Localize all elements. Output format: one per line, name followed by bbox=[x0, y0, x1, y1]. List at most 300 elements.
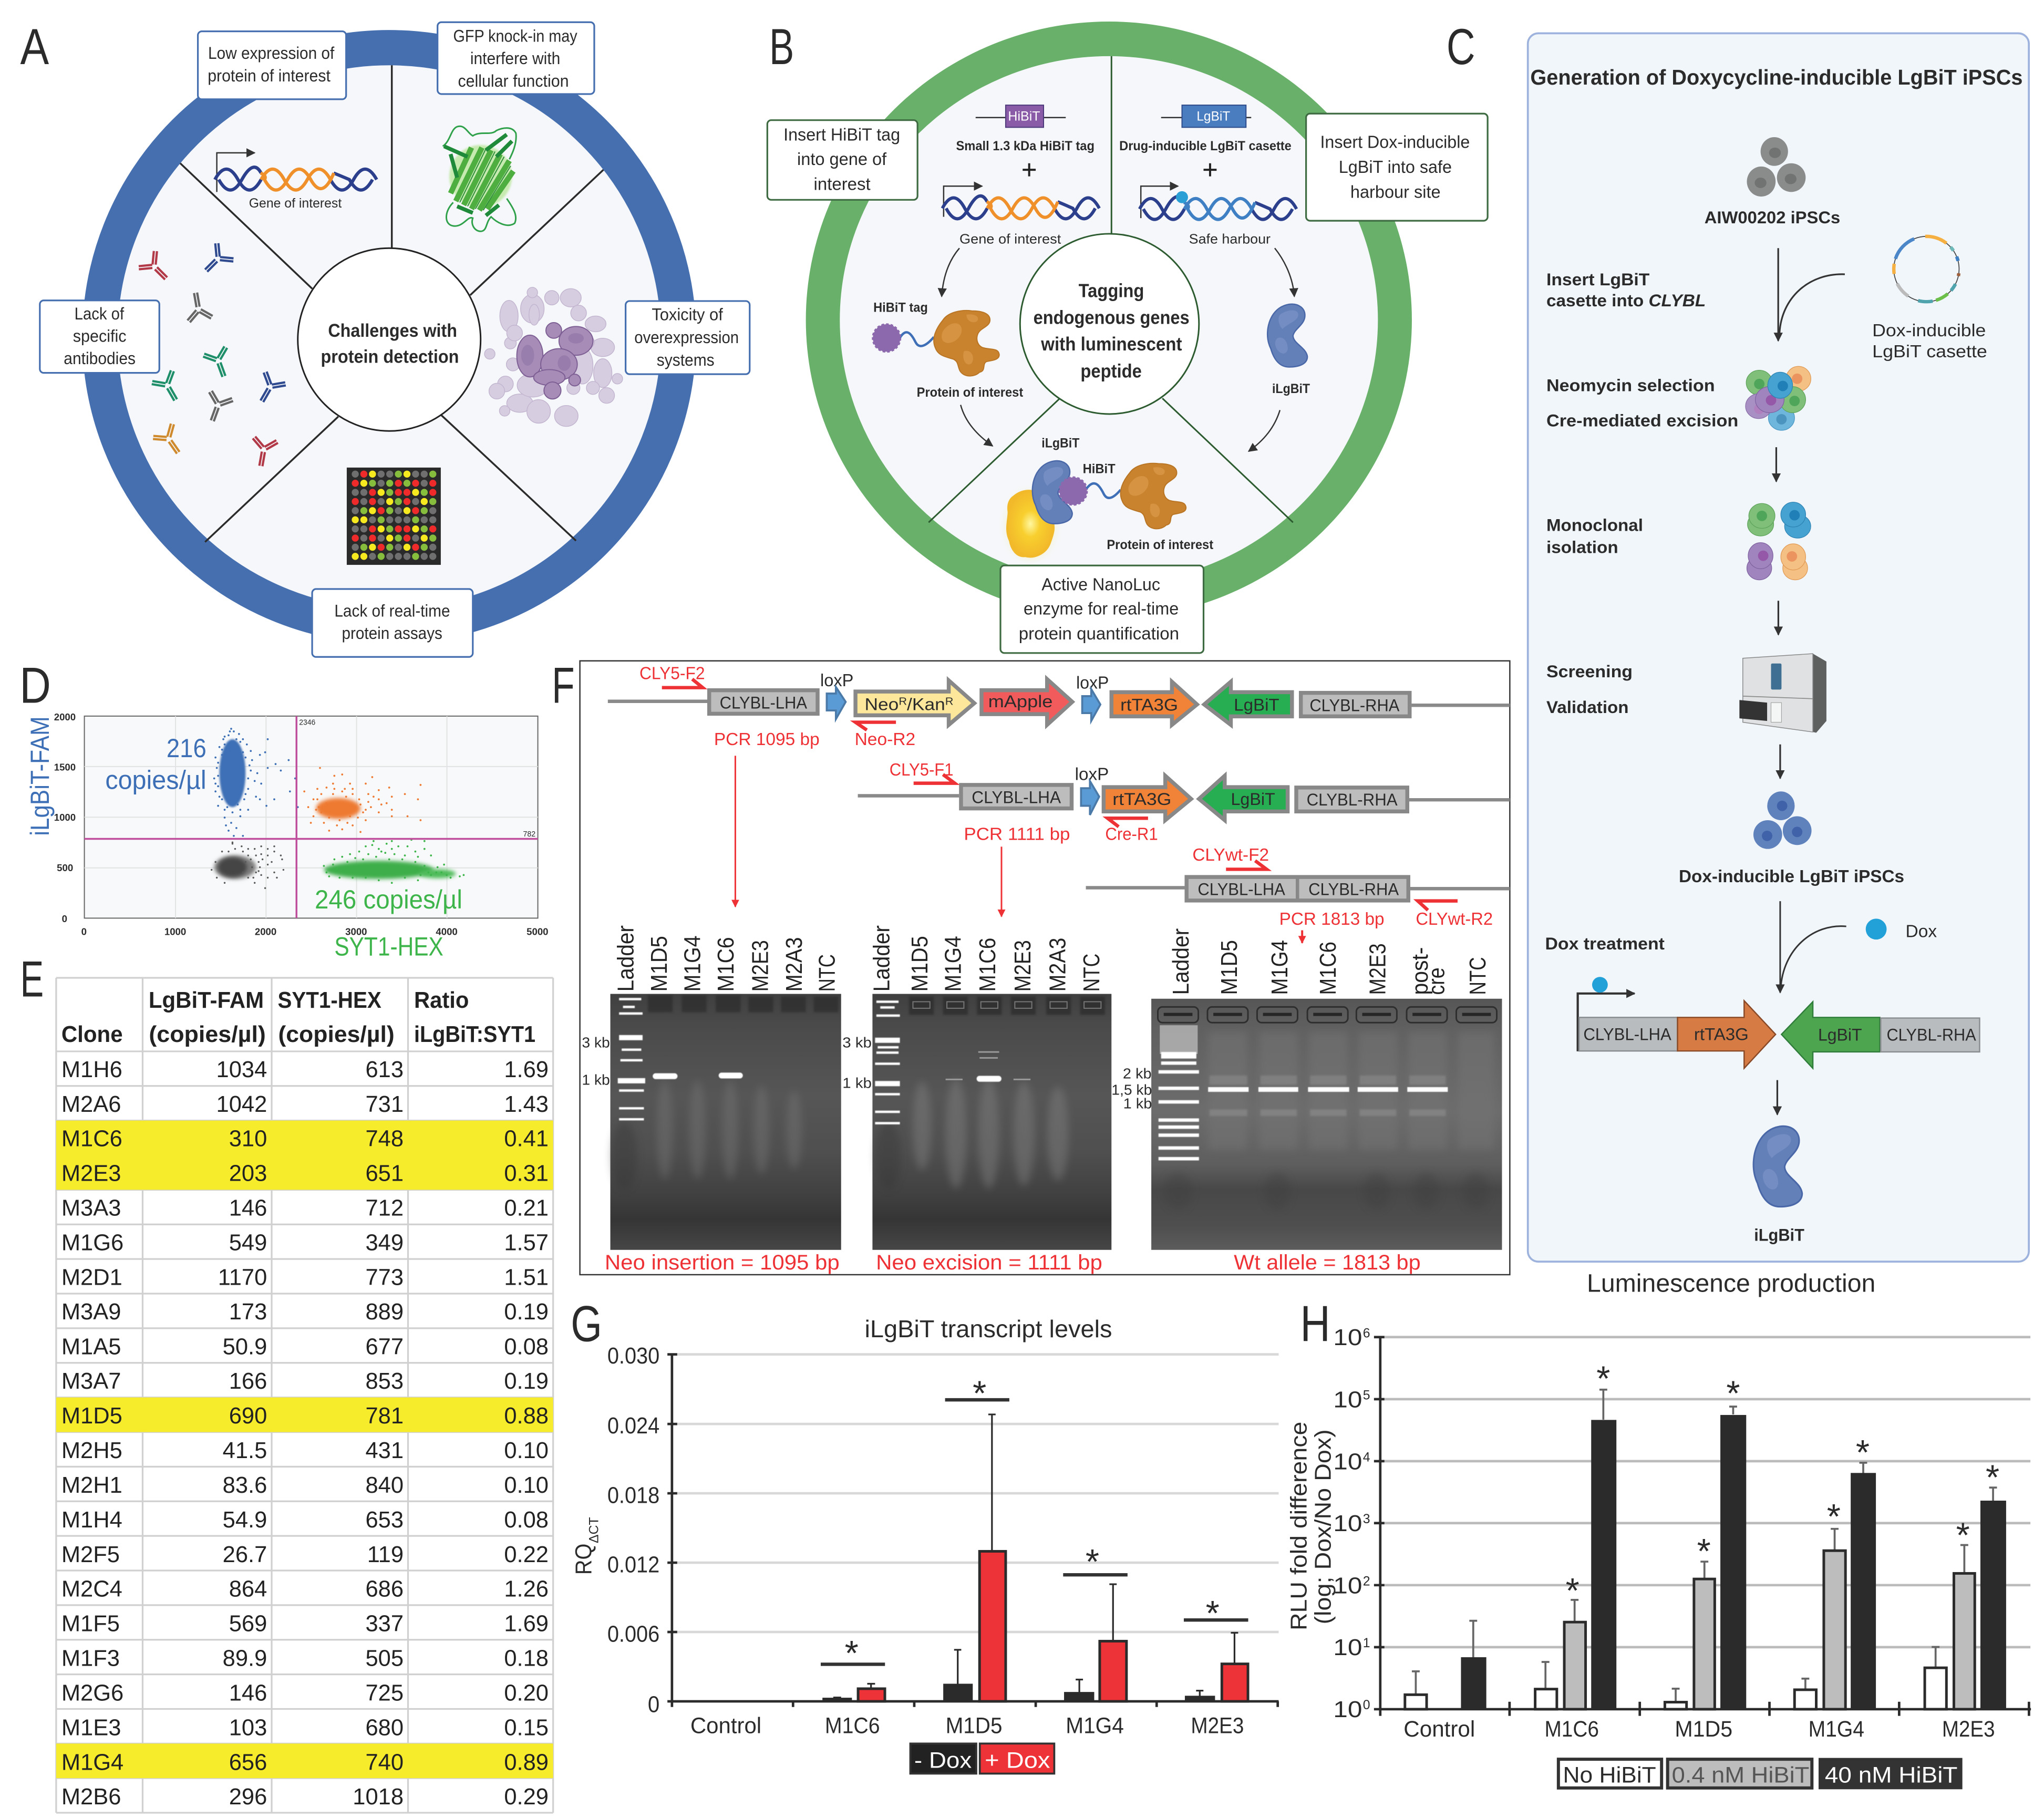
table header: Ratio bbox=[414, 988, 469, 1013]
significance asterisks: * bbox=[1086, 1542, 1099, 1582]
legend: plus Dox bbox=[980, 1743, 1054, 1773]
table rows: M2D1 bbox=[61, 1265, 122, 1290]
workflow title: Generation of Doxycycline-inducible LgBiT iPSCs bbox=[1530, 65, 2022, 89]
y tick labels: 1000 bbox=[54, 812, 76, 823]
gel 2 size markers bbox=[842, 1034, 872, 1091]
axes bbox=[667, 1355, 1278, 1707]
table header: SYT1-HEX bbox=[277, 988, 381, 1013]
table rows: 0.10 bbox=[504, 1438, 549, 1463]
construct 3 primers: CLYwt-R2 bbox=[1416, 910, 1493, 929]
gel captions bbox=[605, 1251, 1421, 1274]
table rows: 740 bbox=[365, 1750, 404, 1775]
significance asterisks: * bbox=[845, 1634, 859, 1673]
y tick labels: 2 bbox=[1363, 1575, 1370, 1589]
table rows: 725 bbox=[365, 1681, 404, 1706]
arrow: to iLgBiT bbox=[1777, 1080, 1778, 1114]
construct diagram: LgBiT bbox=[1818, 1026, 1862, 1045]
icon: Dox-inducible cells bbox=[1679, 791, 1904, 886]
construct 3 primers: PCR 1813 bp bbox=[1279, 910, 1385, 929]
panel letter B: B bbox=[769, 18, 794, 75]
y tick labels: 0 bbox=[648, 1692, 659, 1718]
copies label blue: 216 bbox=[167, 734, 207, 763]
category labels: M1D5 bbox=[946, 1713, 1002, 1738]
panel letter F: F bbox=[552, 656, 575, 714]
x tick labels: 3000 bbox=[345, 926, 367, 937]
category labels bbox=[690, 1713, 1244, 1738]
construct 1: R bbox=[899, 696, 907, 707]
panel letter G: G bbox=[571, 1295, 602, 1352]
AIW cells: AIW00202 iPSCs bbox=[1705, 208, 1840, 227]
gel 2 lane labels: M1D5 bbox=[907, 936, 933, 991]
threshold values: 2346 bbox=[299, 719, 315, 727]
table rows: 1018 bbox=[353, 1784, 404, 1810]
table rows: M1H4 bbox=[61, 1507, 122, 1533]
construct 1: rtTA3G bbox=[1120, 696, 1178, 715]
table rows: 686 bbox=[365, 1577, 404, 1602]
table header: LgBiT-FAM bbox=[149, 988, 264, 1013]
Dox molecule legend: Dox bbox=[1906, 922, 1937, 942]
table rows: M1A5 bbox=[61, 1334, 121, 1359]
panel letter D: D bbox=[19, 656, 51, 714]
callout: active NanoLuc bbox=[1000, 565, 1204, 653]
x tick labels: 0 bbox=[81, 926, 87, 937]
callout: toxicity: overexpression bbox=[634, 328, 739, 347]
construct diagram: CLYBL-LHA bbox=[1583, 1025, 1671, 1044]
step text: insert bbox=[1546, 270, 1706, 310]
gel 1 image bbox=[611, 994, 841, 1250]
table rows: 0.21 bbox=[504, 1196, 549, 1221]
centre circle: Challenges with bbox=[328, 321, 457, 341]
gel 2 size markers: 1 kb bbox=[842, 1075, 872, 1091]
y axis label: (log; Dox/No Dox) bbox=[1311, 1429, 1336, 1624]
wheel ring bbox=[806, 22, 1412, 618]
table rows: 146 bbox=[229, 1681, 267, 1706]
centre circle: Tagging bbox=[1079, 280, 1144, 302]
icon: plasmid: Dox-inducible bbox=[1872, 321, 1986, 340]
table rows: M1C6 bbox=[61, 1127, 122, 1152]
y tick labels: 1 bbox=[1363, 1636, 1370, 1650]
x tick labels: 1000 bbox=[164, 926, 186, 937]
gel 3 lane labels: Ladder bbox=[1169, 928, 1194, 995]
table rows: M2H1 bbox=[61, 1473, 122, 1498]
gel 3 lane labels bbox=[1169, 928, 1491, 995]
callout: antibodies: specific bbox=[73, 326, 127, 345]
table rows: M2F5 bbox=[61, 1542, 120, 1567]
gel 1 lane labels: M2A3 bbox=[782, 937, 807, 991]
centre circle bbox=[1020, 234, 1199, 414]
table rows: M1G4 bbox=[61, 1750, 123, 1775]
step text: insert: Insert LgBiT bbox=[1546, 270, 1650, 289]
construct diagram bbox=[1578, 977, 1979, 1068]
bars: no HiBiT bbox=[1405, 1668, 1946, 1709]
spokes bbox=[180, 65, 603, 542]
legend: 40 nM HiBiT: 40 nM HiBiT bbox=[1825, 1762, 1957, 1787]
icon: gene of interest DNA bbox=[215, 153, 377, 211]
table rows: 0.19 bbox=[504, 1299, 549, 1325]
callout: insert Dox-inducible bbox=[1306, 113, 1488, 221]
step text: Dox treatment: Dox treatment bbox=[1545, 934, 1665, 953]
table rows: M3A7 bbox=[61, 1369, 121, 1394]
x axis label: SYT1-HEX bbox=[334, 932, 443, 961]
table rows: 0.18 bbox=[504, 1646, 549, 1671]
gel 3 image bbox=[1151, 999, 1502, 1250]
legend: plus Dox: + Dox bbox=[985, 1748, 1050, 1773]
legend: 40 nM HiBiT bbox=[1819, 1758, 1963, 1789]
arrow: gene to tag bbox=[942, 248, 959, 296]
centre circle: peptide bbox=[1080, 360, 1142, 381]
gel captions: Neo insertion = 1095 bp bbox=[605, 1251, 840, 1274]
callout: low expression: Low expression of bbox=[208, 44, 335, 63]
step text: selection: Neomycin selection bbox=[1546, 376, 1715, 395]
gel captions: Neo excision = 1111 bp bbox=[876, 1251, 1102, 1274]
table rows: 748 bbox=[365, 1127, 404, 1152]
gel 2 lane labels: M2A3 bbox=[1045, 938, 1070, 991]
table rows: 1170 bbox=[218, 1265, 267, 1290]
centre circle: endogenous genes bbox=[1034, 306, 1190, 328]
y axis label bbox=[571, 1517, 601, 1575]
arrow: to Dox-inducible cells bbox=[1780, 745, 1781, 778]
gel 1 lane labels: M2E3 bbox=[748, 940, 773, 991]
legend: 0.4 nM HiBiT: 0.4 nM HiBiT bbox=[1672, 1762, 1809, 1787]
orange droplets bbox=[304, 768, 420, 832]
gel 1 lane labels: M1G4 bbox=[680, 935, 705, 991]
table rows: 0.19 bbox=[504, 1369, 549, 1394]
icon: GFP protein barrel bbox=[443, 126, 516, 231]
y tick labels: 10 bbox=[1333, 1449, 1362, 1474]
bars: 0.4 nM HiBiT bbox=[1564, 1551, 1975, 1709]
table rows: 656 bbox=[229, 1750, 267, 1775]
x tick labels: 5000 bbox=[527, 926, 549, 937]
y tick labels bbox=[54, 711, 76, 924]
active NanoLuc complex illustration: iLgBiT bbox=[1041, 436, 1079, 450]
gel 2 lane labels bbox=[870, 925, 1104, 991]
callout: real-time assays: protein assays bbox=[342, 624, 442, 643]
wheel interior bbox=[840, 56, 1378, 584]
legend: no HiBiT: No HiBiT bbox=[1563, 1762, 1656, 1787]
table header: (copies/µl) bbox=[149, 1022, 266, 1047]
panel G: transcript bar chart bbox=[571, 1315, 1278, 1773]
gel 3 lane labels: NTC bbox=[1465, 957, 1491, 995]
LgBiT construct bbox=[1119, 105, 1292, 153]
table header bbox=[61, 988, 535, 1047]
table rows: 712 bbox=[365, 1196, 404, 1221]
y tick labels: 0 bbox=[62, 913, 67, 924]
iLgBiT illustration: iLgBiT bbox=[1272, 382, 1310, 396]
construct 1: R bbox=[945, 696, 954, 707]
table rows: 1.43 bbox=[504, 1092, 549, 1117]
construct 3 bbox=[1086, 876, 1510, 901]
callout: GFP knock-in bbox=[438, 22, 594, 94]
panel letter H: H bbox=[1300, 1295, 1330, 1352]
gel 1 lane labels: M1C6 bbox=[714, 937, 739, 991]
table rows: 653 bbox=[365, 1507, 404, 1533]
table rows: 0.22 bbox=[504, 1542, 549, 1567]
gel 3 size markers: 1 kb bbox=[1123, 1095, 1152, 1111]
y axis label: RQ bbox=[571, 1544, 596, 1575]
copies label blue bbox=[105, 734, 207, 794]
significance asterisks: * bbox=[1726, 1374, 1740, 1413]
workflow background bbox=[1528, 33, 2029, 1262]
table rows: 173 bbox=[229, 1299, 267, 1325]
y axis label: ΔCT bbox=[587, 1517, 601, 1543]
panel A: challenges wheel bbox=[40, 22, 750, 657]
table rows: 349 bbox=[365, 1230, 404, 1255]
callout: antibodies: Lack of bbox=[75, 304, 125, 323]
centre circle bbox=[298, 248, 481, 431]
callout: real-time assays bbox=[312, 589, 473, 657]
table rows: 1.26 bbox=[504, 1577, 549, 1602]
construct 3: CLYBL-LHA bbox=[1198, 880, 1285, 898]
panel letter C: C bbox=[1447, 18, 1475, 75]
gel 3 lane labels: M1C6 bbox=[1316, 942, 1341, 995]
table rows: M2H5 bbox=[61, 1438, 122, 1463]
table rows: 1034 bbox=[216, 1057, 267, 1082]
construct 2 primers: PCR 1111 bp bbox=[964, 824, 1070, 844]
y tick labels bbox=[1333, 1325, 1370, 1722]
y tick labels: 0.012 bbox=[607, 1553, 659, 1578]
table rows: 310 bbox=[229, 1127, 267, 1152]
green droplets bbox=[324, 840, 463, 883]
table rows: 853 bbox=[365, 1369, 404, 1394]
construct 2: rtTA3G bbox=[1112, 790, 1171, 809]
category labels: M1G4 bbox=[1066, 1713, 1124, 1738]
table rows: 549 bbox=[229, 1230, 267, 1255]
table rows: M1E3 bbox=[61, 1715, 121, 1740]
icon: lab instrument bbox=[1739, 654, 1826, 732]
table rows: 0.31 bbox=[504, 1161, 549, 1186]
table grid bbox=[56, 978, 553, 1813]
significance asterisks: * bbox=[973, 1374, 986, 1413]
table rows: 26.7 bbox=[223, 1542, 267, 1567]
arrow: Dox treatment bbox=[1780, 901, 1846, 993]
callout: insert Dox-inducible: harbour site bbox=[1350, 182, 1441, 202]
chart title: iLgBiT transcript levels bbox=[864, 1315, 1112, 1342]
table rows: 505 bbox=[365, 1646, 404, 1671]
x tick labels: 4000 bbox=[436, 926, 458, 937]
gel 3 lane labels: cre bbox=[1424, 967, 1450, 995]
construct 1 primers: PCR 1095 bp bbox=[714, 730, 820, 749]
callout: active NanoLuc: Active NanoLuc bbox=[1041, 575, 1160, 594]
HiBiT construct: HiBiT bbox=[1008, 109, 1040, 123]
table rows: M2C4 bbox=[61, 1577, 122, 1602]
threshold lines bbox=[85, 716, 538, 918]
construct 3 primers bbox=[1192, 845, 1493, 943]
table rows: M2E3 bbox=[61, 1161, 121, 1186]
construct 1 primers bbox=[639, 664, 915, 907]
y tick labels: 4 bbox=[1363, 1450, 1370, 1464]
significance asterisks: * bbox=[1697, 1532, 1711, 1571]
table rows: 1042 bbox=[216, 1092, 267, 1117]
table rows: 50.9 bbox=[223, 1334, 267, 1359]
significance asterisks bbox=[1566, 1359, 1999, 1610]
arrow: insert cassette bbox=[1778, 248, 1845, 341]
table rows: M1H6 bbox=[61, 1057, 122, 1082]
y tick labels: 0.030 bbox=[607, 1344, 659, 1369]
significance asterisks bbox=[845, 1374, 1220, 1673]
construct 1: loxP bbox=[1076, 673, 1109, 693]
significance asterisks: * bbox=[1566, 1571, 1580, 1610]
callout: active NanoLuc: protein quantification bbox=[1019, 624, 1179, 644]
table header: (copies/µl) bbox=[278, 1022, 395, 1047]
panel H: luminescence bar chart bbox=[1286, 1325, 2031, 1789]
table rows: M2B6 bbox=[61, 1784, 121, 1810]
y tick labels: 10 bbox=[1333, 1325, 1362, 1350]
table rows: 54.9 bbox=[223, 1507, 267, 1533]
arrow: tagged protein to complex bbox=[961, 405, 993, 446]
icon: Dox-inducible cells: Dox-inducible LgBiT iPSCs bbox=[1679, 867, 1904, 886]
gel 1 size markers: 3 kb bbox=[582, 1034, 610, 1050]
icon: iLgBiT protein: iLgBiT bbox=[1754, 1225, 1804, 1244]
table rows: 41.5 bbox=[223, 1438, 267, 1463]
active NanoLuc complex illustration: HiBiT bbox=[1083, 462, 1116, 476]
step text: screening: Screening bbox=[1546, 662, 1633, 681]
gel 1 lane labels: Ladder bbox=[614, 925, 639, 991]
significance asterisks: * bbox=[1596, 1359, 1610, 1398]
table rows: 0.08 bbox=[504, 1334, 549, 1359]
category labels: M1C6 bbox=[1544, 1717, 1599, 1741]
callout: insert HiBiT: Insert HiBiT tag bbox=[783, 126, 900, 145]
callout: insert HiBiT bbox=[767, 120, 917, 200]
panel C: generation workflow bbox=[1528, 33, 2029, 1262]
category labels: M2E3 bbox=[1191, 1713, 1244, 1738]
table rows: 680 bbox=[365, 1715, 404, 1740]
y axis label: RLU fold difference bbox=[1286, 1422, 1312, 1630]
y tick labels: 10 bbox=[1333, 1387, 1362, 1412]
table rows: 119 bbox=[367, 1542, 404, 1567]
table rows: 1.57 bbox=[504, 1230, 549, 1255]
construct 1: LgBiT bbox=[1234, 696, 1279, 715]
construct 2: CLYBL-RHA bbox=[1307, 790, 1398, 809]
icon: plasmid: LgBiT casette bbox=[1872, 342, 1987, 361]
gray droplets bbox=[212, 842, 283, 888]
table rows: 0.29 bbox=[504, 1784, 549, 1810]
table rows: 83.6 bbox=[223, 1473, 267, 1498]
grid bbox=[85, 716, 538, 918]
centre circle: protein detection bbox=[321, 347, 459, 367]
error bars bbox=[833, 1414, 1238, 1698]
table rows: 203 bbox=[229, 1161, 267, 1186]
bars: 40 nM HiBiT bbox=[1461, 1415, 2006, 1709]
category labels bbox=[1403, 1717, 1995, 1741]
construct 1 bbox=[608, 671, 1510, 725]
DNA: safe harbour bbox=[1140, 186, 1296, 247]
table rows: 1.69 bbox=[504, 1612, 549, 1637]
icon: microarray plate bbox=[347, 468, 441, 565]
significance asterisks: * bbox=[1856, 1433, 1870, 1472]
plot area bbox=[85, 716, 538, 918]
construct diagram: rtTA3G bbox=[1694, 1025, 1749, 1044]
x tick labels bbox=[81, 926, 549, 937]
table rows: 431 bbox=[365, 1438, 404, 1463]
significance bars bbox=[821, 1400, 1248, 1664]
y tick labels: 3 bbox=[1363, 1512, 1370, 1526]
construct 1: CLYBL-LHA bbox=[720, 693, 808, 712]
construct 1 primers: CLY5-F2 bbox=[639, 664, 705, 684]
AIW cells bbox=[1705, 137, 1840, 227]
legend: minus Dox: - Dox bbox=[914, 1748, 972, 1773]
gel 3 lane labels: M2E3 bbox=[1366, 943, 1391, 995]
gel 1 size markers bbox=[582, 1034, 610, 1088]
construct 1: mApple bbox=[988, 692, 1052, 711]
callout: insert HiBiT: into gene of bbox=[797, 150, 887, 169]
HiBiT tagged protein illustration: HiBiT tag bbox=[873, 301, 928, 315]
frame bbox=[580, 661, 1510, 1275]
table rows: M3A3 bbox=[61, 1196, 121, 1221]
panel letter A: A bbox=[20, 18, 49, 75]
error bars bbox=[1412, 1390, 1997, 1702]
callout: toxicity: systems bbox=[657, 350, 715, 369]
gel 3 size markers: 1,5 kb bbox=[1111, 1082, 1152, 1098]
construct 2: loxP bbox=[1075, 765, 1109, 784]
construct 2 primers: Cre-R1 bbox=[1105, 824, 1158, 844]
table rows: 0.41 bbox=[504, 1127, 549, 1152]
gel 3 size markers bbox=[1111, 1066, 1152, 1111]
table rows: M1F3 bbox=[61, 1646, 120, 1671]
gridlines bbox=[677, 1355, 1278, 1632]
table rows: 337 bbox=[365, 1612, 404, 1637]
construct 1: /Kan bbox=[907, 695, 945, 714]
y tick labels: 10 bbox=[1333, 1635, 1362, 1660]
table rows: 146 bbox=[229, 1196, 267, 1221]
gel 2 lane labels: NTC bbox=[1079, 954, 1104, 991]
table rows: 296 bbox=[229, 1784, 267, 1810]
construct 2: CLYBL-LHA bbox=[972, 788, 1061, 807]
construct 2: LgBiT bbox=[1231, 790, 1275, 809]
table rows: 103 bbox=[229, 1715, 267, 1740]
table header: iLgBiT:SYT1 bbox=[414, 1022, 535, 1047]
table rows: 773 bbox=[365, 1265, 404, 1290]
table rows: 889 bbox=[365, 1299, 404, 1325]
table rows: M1D5 bbox=[61, 1403, 122, 1429]
construct 1: loxP bbox=[820, 671, 853, 690]
gel 2 lane labels: M1G4 bbox=[941, 936, 966, 991]
y tick labels: 10 bbox=[1333, 1697, 1362, 1722]
y tick labels: 0.024 bbox=[607, 1413, 659, 1439]
table rows: 89.9 bbox=[223, 1646, 267, 1671]
table rows: 0.20 bbox=[504, 1681, 549, 1706]
y tick labels: 0 bbox=[1363, 1698, 1370, 1712]
table rows: 1.51 bbox=[504, 1265, 549, 1290]
DNA: safe harbour: Safe harbour bbox=[1189, 231, 1271, 247]
gel 1 size markers: 1 kb bbox=[582, 1072, 610, 1088]
y tick labels: 6 bbox=[1363, 1326, 1370, 1340]
construct 1 primers: Neo-R2 bbox=[855, 730, 915, 749]
bars: minus Dox bbox=[823, 1685, 1214, 1701]
significance asterisks: * bbox=[1986, 1458, 1999, 1497]
callout: GFP knock-in: GFP knock-in may bbox=[453, 26, 577, 45]
arrow: safe harbour to iLgBiT bbox=[1275, 248, 1294, 296]
table rows: 569 bbox=[229, 1612, 267, 1637]
construct 3: CLYBL-RHA bbox=[1308, 880, 1399, 898]
gridlines bbox=[1385, 1337, 2030, 1647]
step text: selection bbox=[1546, 376, 1738, 430]
gel 2 lane labels: M1C6 bbox=[975, 938, 1000, 991]
callout: low expression bbox=[198, 32, 346, 99]
legend: minus Dox bbox=[910, 1743, 976, 1773]
icon: plasmid bbox=[1872, 236, 1987, 361]
panel D: ddPCR scatter plot bbox=[25, 711, 549, 961]
construct 2 primers: CLY5-F1 bbox=[890, 760, 954, 780]
callout: antibodies bbox=[40, 301, 159, 373]
step text: monoclonal bbox=[1546, 515, 1643, 557]
bars: plus Dox bbox=[858, 1551, 1248, 1701]
blue droplets bbox=[214, 729, 298, 836]
copies label blue: copies/µl bbox=[105, 765, 207, 794]
arrow: iLgBiT to complex bbox=[1248, 410, 1280, 451]
gel 2 size markers: 3 kb bbox=[842, 1034, 872, 1050]
callout: low expression: protein of interest bbox=[208, 66, 331, 85]
centre circle: with luminescent bbox=[1040, 333, 1182, 355]
